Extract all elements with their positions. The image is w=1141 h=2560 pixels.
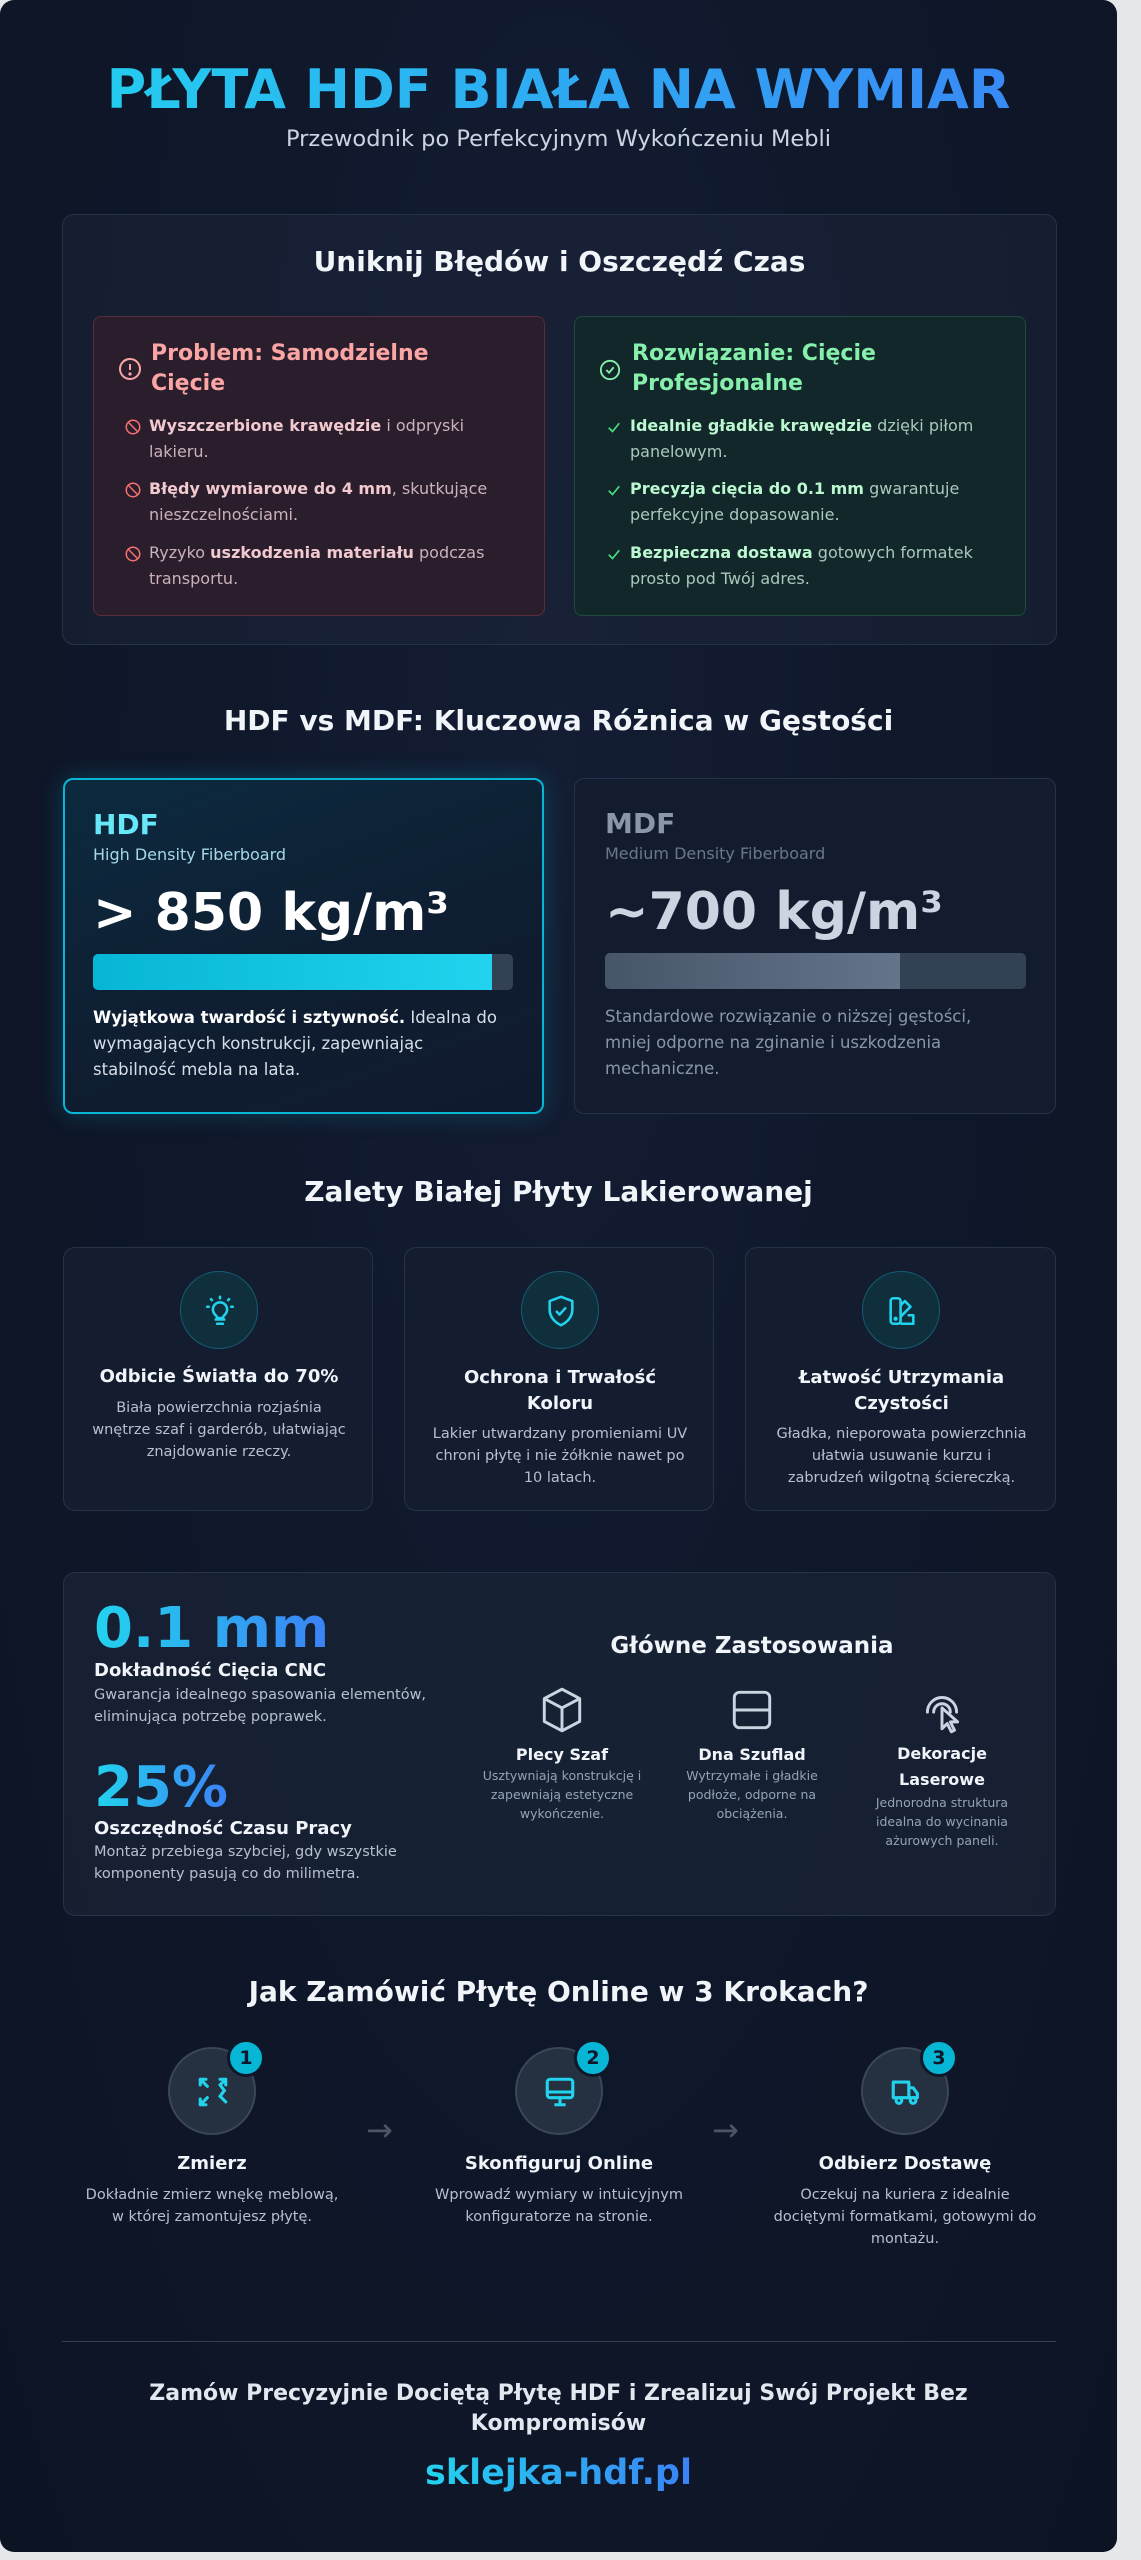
problem list: lakieru.: [149, 442, 209, 461]
panel: stats and applications: obciążenia.: [717, 1806, 787, 1821]
solution list: Bezpieczna dostawa gotowych formatek: [630, 543, 973, 562]
HDF density value: > 850 kg/m³: [93, 883, 449, 943]
application: cabinet backs: Plecy Szaf: [516, 1745, 608, 1764]
solution heading: [632, 341, 876, 396]
icon: bulb: [180, 1271, 258, 1349]
badge 2: 2: [586, 2047, 600, 2069]
heading: benefits: Zalety Białej Płyty Lakierowanej: [304, 1175, 813, 1208]
panel: stats and applications: [63, 1572, 1056, 1916]
solution list: Idealnie gładkie krawędzie dzięki piłom: [630, 416, 973, 435]
step 1: measure: Zmierz: [177, 2153, 247, 2174]
step 2: configure: Skonfiguruj Online: [465, 2153, 653, 2174]
solution list: panelowym.: [630, 442, 727, 461]
panel: stats and applications: wykończenie.: [520, 1806, 604, 1821]
stat: 0.1 mm: eliminująca potrzebę poprawek.: [94, 1709, 327, 1725]
icon: monitor: [515, 2047, 603, 2135]
application: laser decorations: [875, 1696, 1008, 1848]
stat: 0.1 mm: 0.1 mm: [94, 1596, 329, 1661]
card: easy cleaning: Czystości: [854, 1393, 949, 1414]
problem list: Błędy wymiarowe do 4 mm, skutkujące: [149, 479, 487, 498]
problem list: nieszczelnościami.: [149, 505, 298, 524]
application: drawer bottoms: Wytrzymałe i gładkie: [686, 1768, 818, 1783]
solution heading: Rozwiązanie: Cięcie: [632, 341, 876, 366]
step 1: measure: [86, 2042, 338, 2225]
arrow 2: →: [712, 2111, 739, 2149]
application: cabinet backs: Usztywniają konstrukcję i: [483, 1768, 641, 1783]
footer call to action: Zamów Precyzyjnie Dociętą Płytę HDF i Zrealizuj Swój Projekt Bez: [149, 2381, 968, 2406]
step 3: delivery: [774, 2042, 1036, 2247]
step 1: measure: w której zamontujesz płytę.: [112, 2209, 312, 2225]
icon: swatch: [862, 1271, 940, 1349]
arrow 1: →: [366, 2111, 393, 2149]
HDF description: stabilność mebla na lata.: [93, 1060, 300, 1079]
card: protection: chroni płytę i nie żółknie nawet po: [436, 1448, 684, 1464]
card: easy cleaning: [745, 1247, 1056, 1511]
icon: check circle: [600, 360, 620, 380]
panel: HDF: High Density Fiberboard: [93, 845, 286, 864]
heading: HDF vs MDF: HDF vs MDF: Kluczowa Różnica w Gęstości: [224, 704, 893, 737]
card: easy cleaning: Łatwość Utrzymania: [799, 1367, 1004, 1388]
solution heading: Profesjonalne: [632, 371, 803, 396]
step 1: measure: Dokładnie zmierz wnękę meblową,: [86, 2187, 338, 2203]
solution list: Precyzja cięcia do 0.1 mm gwarantuje: [630, 479, 959, 498]
icon: truck: [861, 2047, 949, 2135]
subtitle: Przewodnik po Perfekcyjnym Wykończeniu Mebli: [286, 126, 831, 152]
footer link: sklejka-hdf.pl: [425, 2453, 692, 2493]
title: PŁYTA HDF BIAŁA NA WYMIAR: [107, 58, 1010, 121]
application: laser decorations: Laserowe: [899, 1770, 985, 1789]
card: protection: Koloru: [527, 1393, 593, 1414]
footer call to action: Kompromisów: [471, 2411, 646, 2436]
badge 3: 3: [932, 2047, 946, 2069]
step 3: delivery: Oczekuj na kuriera z idealnie: [800, 2187, 1010, 2203]
MDF description: mniej odporne na zginanie i uszkodzenia: [605, 1033, 941, 1052]
panel: MDF: [574, 778, 1056, 1114]
stat: 25%: komponenty pasują co do milimetra.: [94, 1866, 360, 1882]
application: laser decorations: Dekoracje: [897, 1744, 987, 1763]
step 2: configure: [435, 2042, 683, 2225]
badge 3: [920, 2039, 958, 2077]
step 3: delivery: montażu.: [871, 2231, 939, 2247]
card: protection: [404, 1247, 714, 1511]
stat: 25%: Montaż przebiega szybciej, gdy wszystkie: [94, 1844, 397, 1860]
HDF label: HDF: [93, 808, 159, 841]
MDF description: mechaniczne.: [605, 1059, 720, 1078]
panel: problem vs solution: [62, 214, 1057, 645]
card: protection: 10 latach.: [524, 1470, 596, 1486]
panel: HDF: [63, 778, 544, 1114]
MDF label: MDF: [605, 807, 675, 840]
MDF description: Standardowe rozwiązanie o niższej gęstości,: [605, 1007, 971, 1026]
problem list: [126, 416, 487, 588]
stat: 0.1 mm: Dokładność Cięcia CNC: [94, 1660, 326, 1681]
badge 1: 1: [239, 2047, 253, 2069]
card: easy cleaning: zabrudzeń wilgotną ściereczką.: [788, 1470, 1015, 1486]
problem heading: Problem: Samodzielne: [151, 341, 429, 366]
solution list: [608, 416, 973, 588]
problem list: transportu.: [149, 569, 238, 588]
stat: 25%: 25%: [94, 1755, 228, 1820]
problem list: Wyszczerbione krawędzie i odpryski: [149, 416, 464, 435]
MDF description: [605, 1007, 971, 1078]
problem list: Ryzyko uszkodzenia materiału podczas: [149, 543, 484, 562]
icon: measure: [168, 2047, 256, 2135]
benefit cards: [63, 1247, 1056, 1511]
stat: 25%: [94, 1755, 397, 1882]
card: light reflection: znajdowanie rzeczy.: [147, 1444, 291, 1460]
MDF density value: ~700 kg/m³: [605, 882, 943, 942]
panel: stats and applications: ażurowych paneli.: [885, 1833, 999, 1848]
icon: warning: [119, 358, 141, 380]
stat: 0.1 mm: Gwarancja idealnego spasowania elementów,: [94, 1687, 426, 1703]
HDF description: wymagających konstrukcji, zapewniając: [93, 1034, 423, 1053]
card: light reflection: [63, 1247, 373, 1511]
application: laser decorations: Jednorodna struktura: [876, 1795, 1008, 1810]
card: light reflection: Odbicie Światła do 70%: [100, 1366, 338, 1387]
panel: MDF: Medium Density Fiberboard: [605, 844, 825, 863]
badge 1: [227, 2039, 265, 2077]
heading: avoid mistakes: Uniknij Błędów i Oszczędź Czas: [314, 245, 805, 278]
panel: solution: [574, 316, 1026, 616]
step 3: delivery: dociętymi formatkami, gotowymi do: [774, 2209, 1036, 2225]
card: protection: Ochrona i Trwałość: [464, 1367, 656, 1388]
solution list: perfekcyjne dopasowanie.: [630, 505, 840, 524]
heading: applications: Główne Zastosowania: [610, 1633, 894, 1659]
problem heading: [151, 341, 429, 396]
heading: 3 steps: Jak Zamówić Płytę Online w 3 Krokach?: [249, 1975, 868, 2008]
badge 2: [574, 2039, 612, 2077]
footer call to action: [149, 2381, 968, 2436]
application: cabinet backs: [483, 1688, 641, 1821]
application: drawer bottoms: Dna Szuflad: [698, 1745, 806, 1764]
card: light reflection: wnętrze szaf i garderób, ułatwiając: [92, 1422, 346, 1438]
step 3: delivery: Odbierz Dostawę: [819, 2153, 991, 2174]
HDF density bar: [93, 954, 513, 990]
card: light reflection: Biała powierzchnia rozjaśnia: [116, 1400, 322, 1416]
card: protection: Lakier utwardzany promieniami UV: [433, 1426, 687, 1442]
icon: shield: [521, 1271, 599, 1349]
application: drawer bottoms: [686, 1690, 818, 1821]
problem heading: Cięcie: [151, 371, 225, 396]
card: easy cleaning: ułatwia usuwanie kurzu i: [812, 1448, 991, 1464]
step 2: configure: konfiguratorze na stronie.: [465, 2209, 653, 2225]
application: cabinet backs: zapewniają estetyczne: [491, 1787, 633, 1802]
MDF density bar: [605, 953, 1026, 989]
stat: 25%: Oszczędność Czasu Pracy: [94, 1818, 352, 1839]
stat: 0.1 mm: [94, 1596, 426, 1725]
panel: problem: [93, 316, 545, 616]
application: drawer bottoms: podłoże, odporne na: [688, 1787, 816, 1802]
step 2: configure: Wprowadź wymiary w intuicyjnym: [435, 2187, 683, 2203]
application: laser decorations: idealna do wycinania: [876, 1814, 1008, 1829]
solution list: prosto pod Twój adres.: [630, 569, 810, 588]
card: easy cleaning: Gładka, nieporowata powierzchnia: [776, 1426, 1027, 1442]
HDF description: [93, 1008, 497, 1079]
HDF description: Wyjątkowa twardość i sztywność. Idealna do: [93, 1008, 497, 1027]
